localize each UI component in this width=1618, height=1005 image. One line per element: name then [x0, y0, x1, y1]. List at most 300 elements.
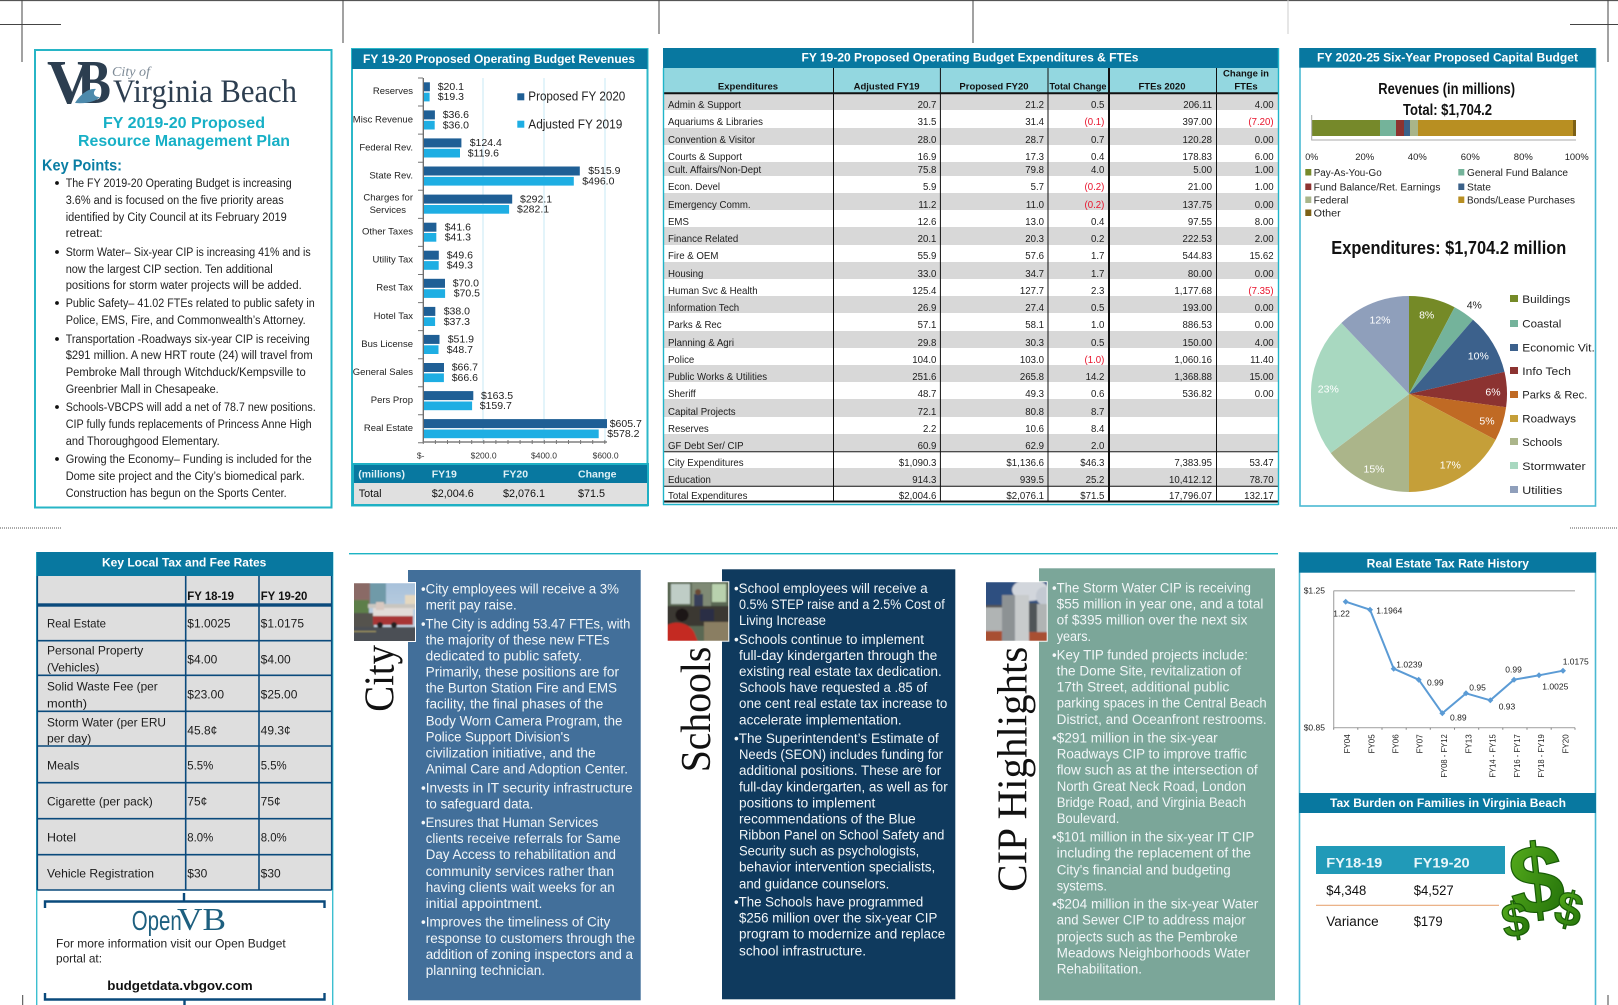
column: total change	[1080, 100, 1105, 502]
column: department names: Information Tech	[668, 303, 739, 314]
stacked bar: revenue sources	[1305, 115, 1589, 163]
column: adjusted FY19: 914.3	[912, 475, 937, 486]
value labels: $51.9	[448, 334, 474, 346]
column: proposed FY20: 28.7	[1025, 135, 1044, 146]
legend: expenditures	[1510, 294, 1595, 497]
panel: expenditures and FTEs table	[663, 48, 1278, 505]
column: proposed FY20: 34.7	[1025, 269, 1044, 280]
value labels: $292.1	[520, 193, 552, 205]
column: adjusted FY19	[899, 100, 937, 502]
column: department names: GF Debt Ser/ CIP	[668, 441, 744, 452]
header: capital budget	[1299, 48, 1596, 68]
column: adjusted FY19: 75.8	[918, 165, 937, 176]
header: revenues: FY 19-20 Proposed Operating Budget Revenues	[363, 52, 635, 66]
rates table: 75¢	[261, 795, 281, 809]
text: schools bullets: Schools have requested a .85 of	[739, 680, 928, 695]
column: department names: Aquariums & Libraries	[668, 117, 763, 128]
column: total change: 0.4	[1091, 217, 1105, 228]
text: CIP bullets: Boulevard.	[1057, 811, 1119, 826]
column: change in FTEs: (7.20)	[1248, 117, 1274, 128]
column: change in FTEs: 6.00	[1255, 152, 1274, 163]
revenues title: Revenues (in millions)	[1378, 81, 1515, 98]
column: total change: 0.6	[1091, 389, 1105, 400]
column: change in FTEs: (7.35)	[1248, 286, 1274, 297]
text: city bullets: •City employees will receive a 3%	[421, 582, 619, 597]
column: change in FTEs: 0.00	[1255, 200, 1274, 211]
rates table: $4.00	[187, 653, 218, 667]
bar chart: revenues by source	[353, 78, 642, 461]
column: proposed FY20: 939.5	[1020, 475, 1044, 486]
legend: revenue sources	[1305, 168, 1575, 220]
value labels: $38.0	[444, 306, 470, 318]
panel: schools	[666, 569, 955, 999]
legend: revenue sources: Pay-As-You-Go	[1314, 168, 1382, 179]
value labels: $159.7	[480, 400, 512, 412]
column: change in FTEs: 4.00	[1255, 100, 1274, 111]
column: total change: 1.0	[1091, 320, 1105, 331]
data labels: 0.89	[1450, 713, 1467, 723]
category labels: Reserves	[373, 86, 413, 97]
column: total change: 2.0	[1091, 441, 1105, 452]
data labels: 1.22	[1333, 609, 1350, 619]
column: change in FTEs: 53.47	[1249, 458, 1274, 469]
header: tax rates	[36, 552, 333, 576]
column: FTEs 2020: 1,368.88	[1174, 372, 1212, 383]
column: adjusted FY19: $2,004.6	[899, 491, 937, 502]
column headers: Expenditures	[718, 81, 778, 92]
callout: open budget portal: For more information visit our Open Budget	[56, 936, 286, 950]
text: CIP bullets: •The Storm Water CIP is receiving	[1052, 580, 1251, 595]
rates table: 49.3¢	[261, 723, 291, 737]
column: total change: $71.5	[1080, 491, 1105, 502]
column: total change: 14.2	[1086, 372, 1105, 383]
text: CIP bullets: •$204 million in the six-year Water	[1052, 897, 1259, 912]
rates table: 8.0%	[261, 831, 287, 845]
value labels: $49.6	[447, 249, 473, 261]
column: change in FTEs: 1.00	[1255, 165, 1274, 176]
text: schools bullets: full-day kindergarten through the	[739, 648, 937, 663]
category labels: Rest Tax	[376, 283, 413, 294]
text: city bullets: Police Support Division's	[426, 729, 570, 744]
text: CIP bullets: and Sewer CIP to address major	[1057, 913, 1246, 928]
text: CIP bullets	[1052, 580, 1267, 976]
category labels: Utility Tax	[373, 255, 413, 266]
stacked bar: revenue sources: 100%	[1565, 152, 1589, 163]
column: total change: (0.1)	[1085, 117, 1104, 128]
column: proposed FY20: 17.3	[1025, 152, 1044, 163]
legend: expenditures: Utilities	[1522, 485, 1563, 497]
column: proposed FY20: 58.1	[1025, 320, 1044, 331]
pie chart: expenditures: 5%	[1479, 416, 1495, 428]
text: city bullets	[421, 582, 635, 978]
text: schools bullets: positions to implement	[739, 796, 876, 811]
column headers: Proposed FY20	[959, 81, 1029, 92]
data labels: 1.0175	[1563, 657, 1589, 667]
icon: green dollar signs: $	[1549, 881, 1588, 939]
header: capital budget: FY 2020-25 Six-Year Proposed Capital Budget	[1317, 51, 1578, 65]
summary table: revenue totals: Change	[578, 469, 617, 481]
text: CIP bullets: North Great Neck Road, London	[1057, 779, 1246, 794]
summary table: revenue totals: Total	[359, 488, 382, 500]
column: proposed FY20: 127.7	[1020, 286, 1044, 297]
column: department names: Housing	[668, 269, 703, 280]
text: CIP bullets: of $395 million over the next six	[1057, 612, 1248, 627]
text: CIP bullets: Meadows Neighborhoods Water	[1057, 945, 1250, 960]
bullet list: Pembroke Mall through Witchduck/Kempsville to	[66, 367, 306, 379]
value labels: $49.3	[447, 260, 473, 272]
text: city bullets: •Ensures that Human Services	[421, 815, 599, 830]
title: FY 2019-20 Proposed	[103, 115, 265, 132]
column: department names: Cult. Affairs/Non-Dept	[668, 165, 761, 176]
x axis labels: FY16 - FY17	[1513, 734, 1522, 778]
line chart: real estate tax rate	[1304, 586, 1589, 778]
pie chart: expenditures: 17%	[1440, 460, 1461, 472]
text: schools bullets: •School employees will receive a	[734, 581, 928, 596]
revenues title	[1378, 81, 1515, 119]
column: FTEs 2020: 137.75	[1182, 200, 1212, 211]
column: adjusted FY19: 20.1	[918, 234, 937, 245]
text: schools bullets: •The Superintendent’s Estimate of	[734, 731, 939, 746]
column: proposed FY20: 265.8	[1020, 372, 1044, 383]
header: expenditures	[663, 48, 1278, 68]
logo: City of Virginia Beach: B	[77, 49, 111, 117]
header: tax rate history	[1299, 552, 1596, 573]
value labels: $70.0	[453, 278, 479, 290]
bullet list: Dome site project and the City’s biomedical park.	[66, 471, 305, 483]
legend: expenditures: Schools	[1522, 437, 1563, 449]
table: tax burden: $179	[1414, 914, 1443, 929]
panel: CIP highlights	[984, 568, 1275, 1000]
x axis labels: $-	[417, 451, 425, 461]
text: CIP bullets: •$101 million in the six-year IT CIP	[1052, 830, 1254, 845]
rates table: 5.5%	[187, 759, 214, 773]
rates table: Storm Water (per ERU	[47, 716, 166, 730]
text: schools bullets: recommendations of the Blue	[739, 812, 916, 827]
summary table: revenue totals: $2,004.6	[432, 488, 474, 500]
value labels: $36.6	[443, 109, 469, 121]
x axis labels: FY20	[1561, 734, 1570, 753]
logo: City of Virginia Beach: V	[47, 49, 91, 117]
legend: revenue sources: Fund Balance/Ret. Earnings	[1314, 183, 1440, 194]
column: change in FTEs: 2.00	[1255, 234, 1274, 245]
text: CIP bullets: the Dome Site, revitalization of	[1057, 663, 1241, 678]
value labels: $605.7	[610, 418, 642, 430]
panel: key points	[35, 49, 332, 508]
category labels: Bus License	[361, 339, 413, 350]
rates table: 75¢	[187, 795, 207, 809]
category labels: State Rev.	[369, 170, 413, 181]
column: adjusted FY19: 20.7	[918, 100, 937, 111]
callout: open budget portal: portal at:	[56, 951, 102, 965]
text: CIP bullets: Roadways CIP to improve traffic	[1057, 747, 1247, 762]
x axis labels: FY04	[1343, 734, 1352, 753]
logo: City of Virginia Beach: Virginia Beach	[113, 74, 297, 110]
column: FTEs 2020: 544.83	[1182, 251, 1212, 262]
column: change in FTEs: 0.00	[1255, 320, 1274, 331]
column: proposed FY20: 103.0	[1020, 355, 1044, 366]
column: department names: Planning & Agri	[668, 338, 734, 349]
text: CIP bullets: City's financial and budgeting	[1057, 862, 1231, 877]
bullet list: identified by City Council at its February 2019	[66, 212, 287, 224]
column: adjusted FY19: $1,090.3	[899, 458, 937, 469]
rates table: Cigarette (per pack)	[47, 795, 153, 809]
column: total change: 1.7	[1091, 251, 1105, 262]
text: schools bullets: behavior intervention specialists,	[739, 860, 935, 875]
text: schools bullets: existing real estate tax dedication.	[739, 664, 942, 679]
column: department names: Human Svc & Health	[668, 286, 758, 297]
text: CIP bullets: •Key TIP funded projects include:	[1052, 647, 1248, 662]
column: department names: Capital Projects	[668, 407, 736, 418]
column: change in FTEs: 1.00	[1255, 182, 1274, 193]
column: adjusted FY19: 2.2	[923, 424, 937, 435]
column: FTEs 2020: 7,383.95	[1174, 458, 1212, 469]
x axis labels: FY13	[1464, 734, 1473, 753]
legend: expenditures: Stormwater	[1522, 461, 1586, 473]
column: FTEs 2020: 886.53	[1182, 320, 1212, 331]
column: total change: (0.2)	[1085, 200, 1104, 211]
photo: fire truck	[352, 581, 417, 643]
rates table: $1.0175	[261, 617, 304, 631]
column: FTEs 2020: 178.83	[1182, 152, 1212, 163]
text: CIP bullets: including the replacement of the	[1057, 846, 1251, 861]
legend: expenditures: Parks & Rec.	[1522, 390, 1587, 402]
rates table	[37, 576, 332, 890]
bullet list: Greenbrier Mall in Chesapeake.	[66, 384, 219, 396]
text: city bullets: clients receive referrals for Same	[426, 831, 621, 846]
heading: key points: Key Points:	[42, 158, 122, 175]
rates table: FY 19-20	[261, 591, 307, 603]
column: FTEs 2020: 80.00	[1188, 269, 1212, 280]
value labels: $48.7	[447, 344, 473, 356]
value labels: $36.0	[443, 119, 469, 131]
column: department names: Fire & OEM	[668, 251, 718, 262]
column: department names: Emergency Comm.	[668, 200, 751, 211]
table: tax burden: $4,527	[1414, 883, 1454, 898]
column: department names: Finance Related	[668, 234, 738, 245]
rates table: $30	[261, 867, 281, 881]
category labels: Real Estate	[364, 423, 413, 434]
column: department names: EMS	[668, 217, 689, 228]
legend: expenditures: Coastal	[1522, 318, 1561, 330]
column: total change: 25.2	[1086, 475, 1105, 486]
header: tax burden: Tax Burden on Families in Virginia Beach	[1330, 798, 1566, 810]
bullet list: and Thoroughgood Elementary.	[66, 436, 220, 448]
column: adjusted FY19: 251.6	[912, 372, 937, 383]
column: total change: 0.5	[1091, 338, 1105, 349]
column: FTEs 2020: 10,412.12	[1169, 475, 1212, 486]
column: total change: 0.4	[1091, 152, 1105, 163]
summary table: revenue totals: (millions)	[358, 469, 405, 481]
bullet list: Schools-VBCPS will add a net of 78.7 new positions.	[66, 402, 316, 414]
column headers: Total Change	[1050, 81, 1106, 92]
logo: OpenVB: VB	[177, 901, 226, 937]
column: adjusted FY19: 60.9	[918, 441, 937, 452]
title	[78, 115, 290, 150]
pie chart: expenditures: 8%	[1419, 310, 1434, 322]
text: city bullets: having clients wait weeks for an	[426, 880, 615, 895]
panel: revenues	[352, 49, 648, 506]
column: change in FTEs: 4.00	[1255, 338, 1274, 349]
legend: revenue sources: Bonds/Lease Purchases	[1467, 196, 1575, 207]
icon: green dollar signs: $	[1504, 822, 1569, 937]
summary table: revenue totals: FY20	[503, 469, 528, 481]
category labels: Services	[370, 205, 406, 216]
legend: expenditures: Economic Vit.	[1522, 343, 1595, 355]
data labels: 1.0239	[1396, 660, 1423, 670]
column: department names: Convention & Visitor	[668, 135, 756, 146]
column: change in FTEs: 0.00	[1255, 389, 1274, 400]
value labels: $163.5	[481, 390, 513, 402]
column: adjusted FY19: 29.8	[918, 338, 937, 349]
column: FTEs 2020: 397.00	[1182, 117, 1212, 128]
text: schools bullets: 0.5% STEP raise and a 2.5% Cost of	[739, 597, 945, 612]
text: CIP bullets: years.	[1057, 629, 1091, 644]
header: tax rates: Key Local Tax and Fee Rates	[102, 558, 266, 570]
data labels: 0.99	[1505, 665, 1522, 675]
data labels: 0.99	[1427, 678, 1444, 688]
column: proposed FY20: 27.4	[1025, 303, 1044, 314]
category labels: Pers Prop	[371, 395, 413, 406]
text: schools bullets: accelerate implementation.	[739, 713, 902, 728]
column: total change: 1.7	[1091, 269, 1105, 280]
text: CIP bullets: systems.	[1057, 878, 1107, 893]
table: tax burden: $4,348	[1326, 883, 1366, 898]
text: city bullets: addition of zoning inspectors and a	[426, 947, 633, 962]
title: Resource Management Plan	[78, 133, 290, 150]
column: proposed FY20: 11.0	[1026, 200, 1044, 211]
column: adjusted FY19: 5.9	[923, 182, 937, 193]
value labels: $282.1	[517, 204, 549, 216]
column: proposed FY20: 57.6	[1025, 251, 1044, 262]
rates table: FY 18-19	[187, 591, 234, 603]
column: department names: Parks & Rec	[668, 320, 722, 331]
bullet list: positions for storm water projects will be added.	[66, 280, 302, 292]
text: schools bullets: full-day kindergarten, as well as for	[739, 780, 948, 795]
text: city bullets: •Invests in IT security infrastructure	[421, 781, 633, 796]
column: FTEs 2020: 1,060.16	[1174, 355, 1212, 366]
rates table: (Vehicles)	[47, 660, 99, 674]
column: adjusted FY19: 28.0	[918, 135, 937, 146]
photo: building	[986, 581, 1048, 642]
bullet list: Police, EMS, Fire, and Commonwealth’s Attorney.	[66, 315, 306, 327]
data labels	[1333, 606, 1589, 723]
text: city bullets: Body Worn Camera Program, the	[426, 713, 622, 728]
column: proposed FY20: 21.2	[1025, 100, 1044, 111]
column: department names: Total Expenditures	[668, 491, 747, 502]
column: change in FTEs: 0.00	[1255, 303, 1274, 314]
x axis labels: FY06	[1391, 734, 1400, 753]
x axis labels	[417, 451, 619, 461]
column: adjusted FY19: 31.5	[918, 117, 937, 128]
icon: green dollar signs: $	[1498, 892, 1533, 949]
header: tax rate history: Real Estate Tax Rate History	[1367, 559, 1530, 571]
bullet list: Public Safety– 41.02 FTEs related to public safety in	[66, 298, 315, 310]
revenues title: Total: $1,704.2	[1403, 102, 1492, 119]
bullet list: 3.6% and is focused on the five priority areas	[66, 195, 284, 207]
text: schools bullets: $256 million over the six-year CIP	[739, 911, 937, 926]
column: department names: Police	[668, 355, 695, 366]
value labels: $119.6	[468, 147, 499, 159]
column: proposed FY20: 80.8	[1025, 407, 1044, 418]
column: proposed FY20: 30.3	[1025, 338, 1044, 349]
data labels: 0.95	[1469, 683, 1486, 693]
column: department names: Education	[668, 475, 711, 486]
column: department names: Public Works & Utilities	[668, 372, 767, 383]
bullet list: Growing the Economy– Funding is included for the	[66, 454, 312, 466]
column headers	[718, 69, 1269, 92]
value labels: $41.6	[445, 221, 471, 233]
rates table: Meals	[47, 759, 79, 773]
text: schools bullets: program to modernize and replace	[739, 927, 945, 942]
rates table: 8.0%	[187, 831, 214, 845]
value labels: $66.6	[452, 372, 478, 384]
column: FTEs 2020	[1169, 100, 1212, 502]
logo: OpenVB: Open	[132, 905, 182, 936]
text: CIP bullets: •$291 million in the six-year	[1052, 731, 1218, 746]
text: city bullets: Animal Care and Adoption Center.	[426, 761, 628, 776]
column: department names: Courts & Support	[668, 152, 742, 163]
pie chart: expenditures: 6%	[1485, 386, 1501, 398]
stacked bar: revenue sources: 0%	[1305, 152, 1319, 163]
data labels: 1.0025	[1542, 682, 1569, 692]
text: city bullets: merit pay raise.	[426, 598, 517, 613]
column: total change: $46.3	[1080, 458, 1105, 469]
column: department names: City Expenditures	[668, 458, 744, 469]
value labels: $70.5	[454, 288, 480, 300]
text: city bullets: dedicated to public safety.	[426, 649, 582, 664]
value labels: $41.3	[445, 232, 471, 244]
text: schools bullets: •Schools continue to implement	[734, 632, 924, 647]
data labels: 1.1964	[1376, 606, 1403, 616]
photo: classroom	[666, 581, 730, 642]
x axis labels: FY07	[1416, 734, 1425, 753]
panel: tax rate history and tax burden	[1299, 552, 1596, 1005]
logo: OpenVB	[132, 901, 226, 937]
column: FTEs 2020: 193.00	[1182, 303, 1212, 314]
legend: expenditures: Buildings	[1522, 294, 1571, 306]
column: total change: 8.4	[1091, 424, 1105, 435]
column: adjusted FY19: 57.1	[918, 320, 937, 331]
column: department names: Econ. Devel	[668, 182, 720, 193]
category labels: General Sales	[353, 367, 413, 378]
column: adjusted FY19: 72.1	[918, 407, 937, 418]
column: department names: Sheriff	[668, 389, 696, 400]
bullet list: CIP fully funds replacements of Princess Anne High	[66, 419, 312, 431]
column: total change: 0.7	[1091, 135, 1105, 146]
rates table: $4.00	[261, 653, 291, 667]
value labels: $578.2	[607, 428, 640, 440]
text: city bullets: Day Access to rehabilitation and	[426, 847, 616, 862]
x axis labels: $200.0	[471, 451, 497, 461]
pie chart: expenditures: 23%	[1318, 384, 1339, 396]
stacked bar: revenue sources: 20%	[1355, 152, 1375, 163]
value labels: $37.3	[444, 316, 470, 328]
x axis labels	[1343, 734, 1570, 778]
text: schools bullets: Needs (SEON) includes funding for	[739, 747, 943, 762]
table: tax burden	[1316, 846, 1505, 929]
x axis labels: FY08 - FY12	[1440, 734, 1449, 778]
text: city bullets: •Improves the timeliness of City	[421, 914, 611, 929]
column: adjusted FY19: 48.7	[918, 389, 937, 400]
header: revenues	[352, 49, 648, 69]
heading: expenditures total: Expenditures: $1,704.2 million	[1331, 237, 1566, 258]
rates table: $1.0025	[187, 617, 231, 631]
text: CIP bullets: $55 million in year one, and a total	[1057, 596, 1263, 611]
rates table: $25.00	[261, 687, 298, 701]
column headers: FTEs 2020	[1138, 81, 1186, 92]
summary table: revenue totals	[353, 464, 648, 505]
rates table: Solid Waste Fee (per	[47, 680, 158, 694]
